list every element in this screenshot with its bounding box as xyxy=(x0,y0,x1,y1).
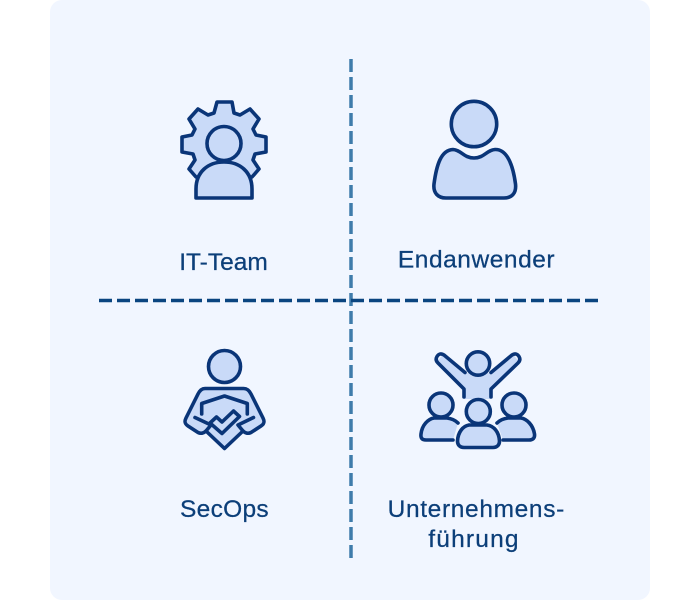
icon: SecOps person with shield xyxy=(185,350,264,448)
icon: end user xyxy=(434,101,516,198)
divider: horizontal dashed line xyxy=(99,299,598,302)
icon: leadership group xyxy=(421,352,535,448)
label: Endanwender: Endanwender xyxy=(398,246,555,274)
label: IT-Team: IT-Team xyxy=(179,249,268,276)
label: SecOps: SecOps xyxy=(180,496,269,523)
label: Unternehmensführung: Unternehmens- xyxy=(388,496,565,523)
divider: vertical dashed line xyxy=(349,59,353,558)
label: Unternehmensführung: führung xyxy=(428,526,520,553)
icon: gear with person xyxy=(182,102,266,198)
